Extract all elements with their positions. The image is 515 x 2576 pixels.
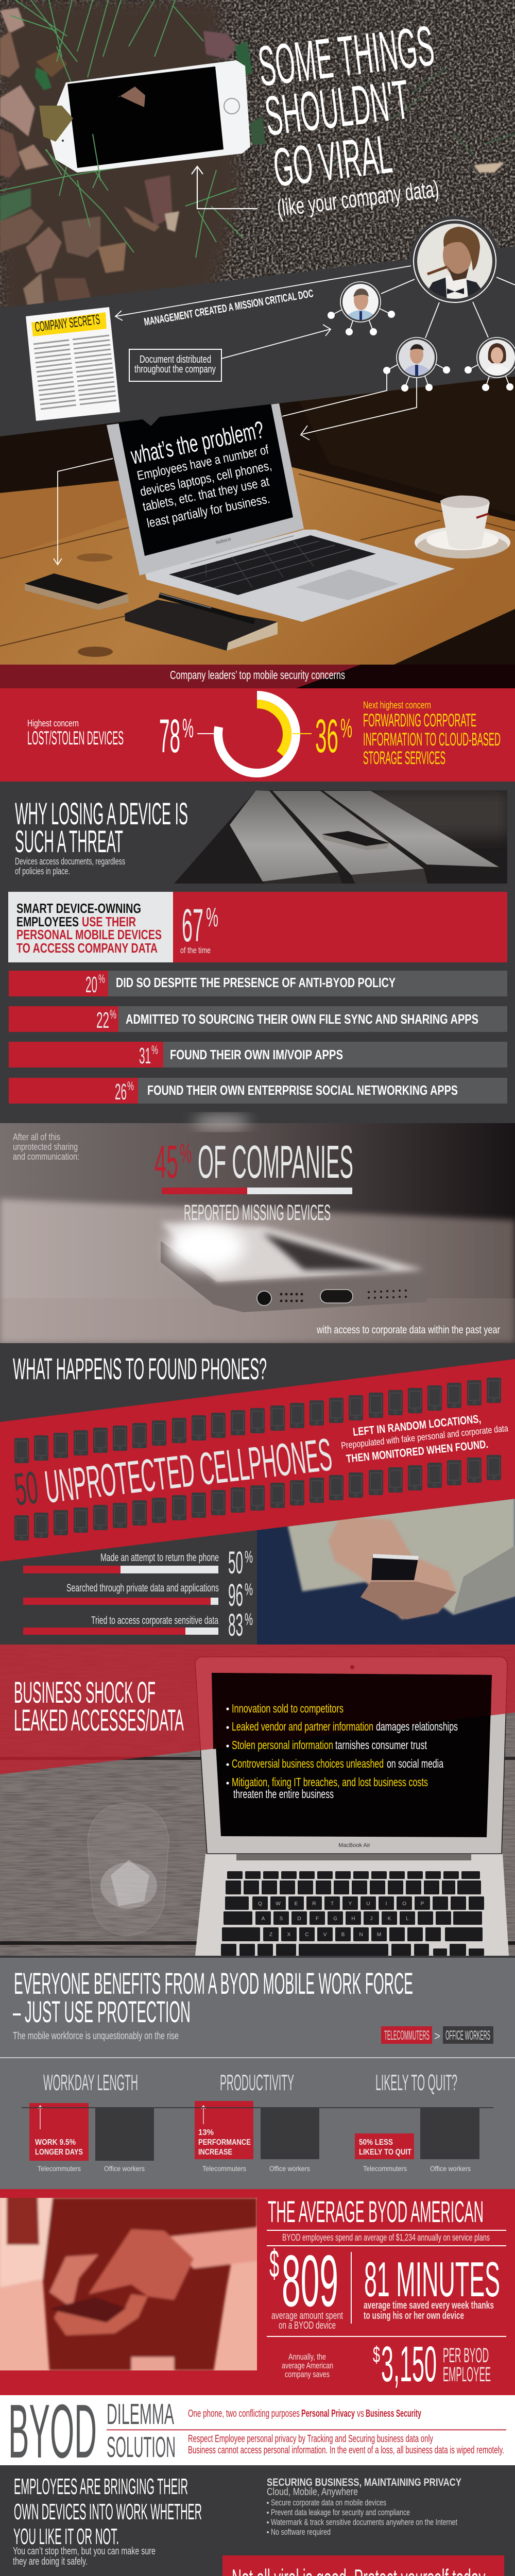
- bar: tried to access corporate data: Tried to access corporate sensitive data: [91, 1615, 218, 1626]
- icon: coffee cup and saucer: [415, 496, 510, 558]
- icon: notebook and pen: [125, 594, 278, 651]
- laptop screen: [212, 1673, 492, 1837]
- bar: tried to access corporate data: %: [245, 1610, 253, 1629]
- text: 50 unprotected cellphones: [12, 1428, 334, 1515]
- keyboard letters: O: [402, 1901, 406, 1907]
- bar: searched private data: [23, 1578, 253, 1613]
- keyboard letters: E: [295, 1901, 298, 1907]
- icon: company secrets document: [26, 307, 120, 421]
- icon row: phones top: [14, 1378, 501, 1463]
- stat: 3150 dollars per employee: average American: [282, 2361, 333, 2370]
- text block: solution description: [188, 2433, 504, 2456]
- icon: laptop with message: MacBook Air: [215, 536, 232, 545]
- heading: why losing a device: SUCH A THREAT: [15, 824, 123, 859]
- banner: fifty unprotected cellphones: [0, 1359, 515, 1562]
- chart: workday length: WORK 9.5%: [35, 2138, 76, 2147]
- chart: productivity: Telecommuters: [202, 2164, 246, 2173]
- panel: why losing a device is such a threat: [0, 782, 515, 1123]
- bar: 20 percent: [9, 971, 507, 997]
- stat: 45 percent of companies: REPORTED MISSING DEVICES: [184, 1200, 331, 1225]
- panel: BYOD dilemma and solution: [0, 2389, 515, 2474]
- arrow: from title to phone: [192, 166, 258, 209]
- panel: company leaders banner: Company leaders’ top mobile security concerns: [170, 668, 345, 682]
- heading: business shock: BUSINESS SHOCK OF: [14, 1676, 156, 1709]
- callout: 67 percent of the time: TO ACCESS COMPANY DATA: [16, 940, 158, 956]
- callout: document distributed: throughout the company: [134, 364, 216, 375]
- stat: 78 percent: %: [182, 714, 194, 743]
- chart: workday length: [29, 2070, 154, 2173]
- keyboard letters: L: [406, 1916, 409, 1922]
- stat: 809 dollars: 809: [282, 2240, 338, 2322]
- panel: BYOD dilemma and solution: SOLUTION: [107, 2431, 176, 2464]
- bar: tried to access corporate data: [23, 1607, 253, 1642]
- stat: 78 percent: 78: [159, 710, 180, 762]
- bar: attempt to return the phone: [23, 1545, 253, 1580]
- panel: business shock of leaked data: LEAKED ACCESSES/DATA: [14, 1704, 184, 1737]
- callout: 67 percent of the time: EMPLOYEES: [16, 914, 79, 929]
- keyboard letters: I: [386, 1901, 387, 1907]
- bar: searched private data: Searched through private data and applications: [66, 1582, 219, 1594]
- text block: securing business: Cloud, Mobile, Anywhere: [267, 2486, 358, 2498]
- chart: likely to quit: [355, 2070, 479, 2173]
- arrow with label: management created doc: MANAGEMENT CREATED A MISSION CRITICAL DOC: [143, 287, 314, 328]
- bar: 20 percent: %: [98, 972, 105, 986]
- callout: 67 percent of the time: USE THEIR: [82, 914, 136, 929]
- text block: after all of this: unprotected sharing: [13, 1142, 78, 1152]
- text block: devices access documents: of policies in place.: [15, 866, 70, 876]
- heading: employees are bringing: YOU LIKE IT OR NOT.: [13, 2524, 119, 2549]
- bulleted list: business consequences: threaten the entire business: [233, 1787, 334, 1801]
- icon: employee node one: [328, 282, 395, 335]
- stat: 45 percent of companies: %: [180, 1139, 192, 1168]
- text block: next highest concern: Next highest concern: [363, 700, 431, 711]
- keyboard letters: P: [421, 1901, 424, 1907]
- text block: dilemma description: vs: [357, 2408, 364, 2419]
- photo: hands tapping a phone, red duotone: [0, 2195, 260, 2370]
- chart: likely to quit: Telecommuters: [363, 2164, 407, 2173]
- text block: problem description: Employees have a number of: [136, 443, 270, 483]
- callout: 67 percent of the time: PERSONAL MOBILE DEVICES: [16, 927, 162, 942]
- keyboard keys: [221, 1871, 484, 1956]
- callout: 67 percent of the time: 67: [182, 900, 203, 952]
- text block: highest concern: [27, 718, 124, 749]
- icon row: phones bottom: [14, 1455, 501, 1540]
- panel: laptop photo scene: [0, 361, 515, 665]
- chart: productivity: 13%: [198, 2128, 214, 2137]
- panel: the average BYOD American: [0, 2189, 515, 2395]
- keyboard letters: G: [333, 1916, 337, 1922]
- icon: white smartphone on the ground: [39, 60, 250, 188]
- keyboard letters: B: [341, 1932, 345, 1938]
- stat: 36 percent: 36: [315, 710, 338, 762]
- title: [255, 14, 440, 222]
- bulleted list: business consequences: [226, 1702, 458, 1801]
- keyboard letters: W: [276, 1901, 281, 1907]
- chart: likely to quit: Office workers: [430, 2164, 471, 2173]
- keyboard letters: R: [312, 1901, 316, 1907]
- callout: 67 percent of the time: SMART DEVICE-OWNING: [16, 901, 141, 916]
- background: soil and dead leaves: [0, 0, 515, 319]
- bar: searched private data: 96: [228, 1578, 243, 1613]
- stat: 3150 dollars per employee: Annually, the: [288, 2352, 326, 2362]
- keyboard letters: J: [370, 1916, 373, 1922]
- heading: everyone benefits: [13, 1967, 413, 2029]
- panel: business shock of leaked data: [0, 1645, 515, 1956]
- stat: 3150 dollars per employee: [282, 2336, 491, 2392]
- icon: company secrets document: COMPANY SECRETS: [34, 312, 101, 335]
- bar: 26 percent: 26: [115, 1079, 127, 1105]
- keyboard letters: K: [388, 1916, 391, 1922]
- text block: securing business: [267, 2477, 461, 2537]
- bar: 26 percent: %: [127, 1079, 134, 1093]
- text block: after all of this: and communication:: [13, 1151, 79, 1162]
- text block: after all of this: After all of this: [13, 1132, 60, 1142]
- text block: dilemma description: One phone, two conflicting purposes: [188, 2408, 300, 2419]
- text block: devices access documents: [15, 856, 125, 876]
- stat: 809 dollars: average amount spent: [271, 2310, 343, 2321]
- panel: why losing a device is such a threat: WHY LOSING A DEVICE IS: [15, 796, 188, 831]
- bar: attempt to return the phone: %: [245, 1548, 253, 1566]
- callout: 67 percent of the time: [8, 892, 507, 962]
- stat: 809 dollars: $: [269, 2242, 279, 2286]
- heading: dilemma: DILEMMA: [107, 2398, 174, 2431]
- callout: not all viral is good: [222, 2555, 504, 2576]
- keyboard letters: F: [316, 1916, 319, 1922]
- panel: employees bringing their own devices: EMPLOYEES ARE BRINGING THEIR: [14, 2474, 188, 2499]
- stat: 45 percent of companies: [154, 1137, 353, 1225]
- keyboard letters: [258, 1901, 424, 1938]
- chart: productivity: PRODUCTIVITY: [220, 2070, 294, 2095]
- chart: productivity: Office workers: [269, 2164, 310, 2173]
- text block: after all of this: [13, 1132, 79, 1162]
- text block: problem description: least partially for business.: [146, 492, 271, 531]
- heading: employees are bringing: [13, 2474, 202, 2549]
- icon: employee node two: [383, 337, 450, 392]
- chart: workday length: Office workers: [104, 2164, 145, 2173]
- callout: document distributed: [129, 349, 221, 381]
- bar: 22 percent: 22: [96, 1008, 109, 1033]
- stat: 809 dollars: on a BYOD device: [279, 2320, 336, 2331]
- bar: 22 percent: %: [110, 1008, 116, 1022]
- bar: 31 percent: %: [151, 1043, 158, 1057]
- legend: telecommuters and office workers: TELECOMMUTERS: [384, 2028, 430, 2043]
- icon: executive portrait: [414, 220, 496, 304]
- stat: 809 dollars: [269, 2240, 343, 2331]
- callout: 67 percent of the time: of the time: [180, 945, 211, 955]
- panel: company leaders banner: [0, 665, 515, 688]
- bar: 26 percent: [9, 1078, 507, 1105]
- icon: black phone on table: [25, 573, 129, 610]
- chart: likely to quit: LIKELY TO QUIT: [359, 2148, 411, 2157]
- stat: 81 minutes: to using his or her own device: [364, 2310, 464, 2321]
- panel: diagonal dark management diagram: [0, 216, 515, 565]
- panel: top mobile security concerns: [0, 688, 515, 782]
- panel: employees bringing their own devices: OWN DEVICES INTO WORK WHETHER: [14, 2499, 202, 2524]
- heading: what's the problem: what’s the problem?: [128, 416, 266, 469]
- heading: why losing a device: [15, 796, 188, 859]
- panel: what happens to found phones: [0, 1343, 515, 1646]
- icon: laptop body and keyboard: [195, 1657, 509, 1956]
- stat: 3150 dollars per employee: company saves: [285, 2369, 330, 2379]
- arrow: document to employees: [221, 325, 331, 359]
- bulleted list: business consequences: Innovation sold to competitors: [232, 1702, 344, 1715]
- bulleted list: business consequences: on social media: [387, 1757, 443, 1770]
- heading: business shock: [15, 1682, 184, 1731]
- keyboard letters: T: [331, 1901, 334, 1907]
- text block: securing business: Prevent data leakage for security and compliance: [271, 2507, 410, 2517]
- bulleted list: business consequences: Mitigation, fixing IT breaches, and lost business costs: [232, 1775, 428, 1789]
- panel: everyone benefits from BYOD: [0, 1956, 515, 2189]
- photo: phone on park bench: [174, 790, 510, 884]
- panel: employees bringing their own devices: [0, 2465, 515, 2576]
- donut chart: 78 and 36 percent: [218, 696, 296, 773]
- text block: problem description: devices laptops, cell phones,: [139, 459, 273, 499]
- callout: 67 percent of the time: %: [206, 903, 218, 933]
- text block: you can't stop them: they are doing it safely.: [13, 2556, 88, 2567]
- text block: problem description: tablets, etc. that they use at: [142, 474, 270, 514]
- text block: securing business: Secure corporate data on mobile devices: [271, 2498, 386, 2507]
- bulleted list: business consequences: tarnishes consumer trust: [335, 1738, 427, 1752]
- stat: 3150 dollars per employee: 3,150: [381, 2336, 437, 2392]
- chart: productivity: PERFORMANCE: [198, 2138, 251, 2147]
- heading: everyone benefits: – JUST USE PROTECTION: [13, 1995, 191, 2029]
- bar: 20 percent: DID SO DESPITE THE PRESENCE OF ANTI-BYOD POLICY: [116, 975, 396, 990]
- chart: workday length: Telecommuters: [38, 2164, 81, 2173]
- bar: attempt to return the phone: 50: [228, 1545, 243, 1580]
- keyboard letters: Z: [269, 1932, 272, 1938]
- text block: next highest concern: [363, 700, 501, 768]
- panel: hero photo with lost phone: [0, 0, 515, 319]
- text: 50 unprotected cellphones: 50: [12, 1461, 41, 1515]
- text block: highest concern: Highest concern: [27, 718, 79, 728]
- callout: document distributed: Document distributed: [140, 354, 211, 365]
- panel: BYOD dilemma and solution: BYOD: [8, 2389, 97, 2474]
- text block: you can't stop them: You can’t stop them, but you can make sure: [13, 2546, 156, 2557]
- keyboard letters: M: [377, 1932, 381, 1938]
- legend: telecommuters and office workers: >: [434, 2029, 440, 2043]
- connector lines between people: [54, 277, 515, 565]
- bar: attempt to return the phone: Made an attempt to return the phone: [100, 1552, 219, 1564]
- keyboard letters: V: [323, 1932, 327, 1938]
- icon: blurred smartphone: [161, 1223, 427, 1312]
- keyboard letters: C: [305, 1932, 309, 1938]
- text block: devices access documents: Devices access documents, regardless: [15, 856, 125, 867]
- chart: productivity: INCREASE: [198, 2148, 232, 2157]
- text block: dilemma description: Personal Privacy: [301, 2408, 355, 2419]
- panel: top mobile security concerns: LOST/STOLEN DEVICES: [27, 727, 124, 749]
- bulleted list: business consequences: Leaked vendor and partner information: [232, 1720, 373, 1733]
- chart: workday length: LONGER DAYS: [35, 2148, 83, 2157]
- keyboard letters: U: [366, 1901, 370, 1907]
- bar: 22 percent: [9, 1006, 507, 1033]
- icon: laptop with message: [107, 403, 455, 622]
- bar: 31 percent: FOUND THEIR OWN IM/VOIP APPS: [170, 1047, 343, 1062]
- text block: securing business: SECURING BUSINESS, MAINTAINING PRIVACY: [267, 2477, 461, 2488]
- chart: likely to quit: 50% LESS: [359, 2138, 393, 2147]
- bar: 31 percent: [9, 1042, 507, 1069]
- overlay: diagonal red tint: [0, 1645, 515, 1774]
- keyboard letters: A: [262, 1916, 265, 1922]
- panel: top mobile security concerns: %: [340, 714, 352, 743]
- text block: mobile workforce on the rise: The mobile workforce is unquestionably on the rise: [13, 2030, 179, 2042]
- keyboard letters: N: [359, 1932, 363, 1938]
- keyboard letters: S: [280, 1916, 283, 1922]
- text block: left in random locations: [340, 1412, 509, 1465]
- chart: workday length: WORKDAY LENGTH: [43, 2070, 138, 2095]
- bulleted list: business consequences: Stolen personal information: [232, 1738, 333, 1752]
- keyboard letters: Y: [349, 1901, 352, 1907]
- text block: dilemma description: Business Security: [366, 2408, 422, 2419]
- bulleted list: business consequences: damages relationships: [376, 1720, 458, 1733]
- bar: searched private data: %: [245, 1580, 253, 1599]
- panel: 45 percent of companies reported missing devices: [0, 1116, 515, 1343]
- bar: 20 percent: 20: [85, 972, 97, 997]
- icon: employee node three: [465, 337, 515, 391]
- icon: glass of water: [88, 1803, 169, 1936]
- keyboard letters: D: [297, 1916, 301, 1922]
- stat: 36 percent: [293, 710, 352, 762]
- bar: tried to access corporate data: 83: [228, 1607, 243, 1642]
- text block: you can't stop them: [13, 2546, 156, 2567]
- stat: 45 percent of companies: 45: [154, 1137, 178, 1188]
- photo: hands holding a phone: [257, 1489, 515, 1646]
- keyboard letters: H: [351, 1916, 355, 1922]
- bar: 31 percent: 31: [139, 1043, 151, 1069]
- keyboard letters: Q: [258, 1901, 262, 1907]
- bulleted list: business consequences: Controversial business choices unleashed: [232, 1757, 384, 1770]
- text block: problem description: [136, 443, 273, 531]
- icon: laptop body and keyboard: MacBook Air: [338, 1842, 370, 1849]
- stat: 3150 dollars per employee: $: [373, 2342, 380, 2367]
- keyboard letters: X: [287, 1932, 291, 1938]
- chart: productivity: [195, 2070, 319, 2173]
- text block: securing business: No software required: [271, 2527, 331, 2537]
